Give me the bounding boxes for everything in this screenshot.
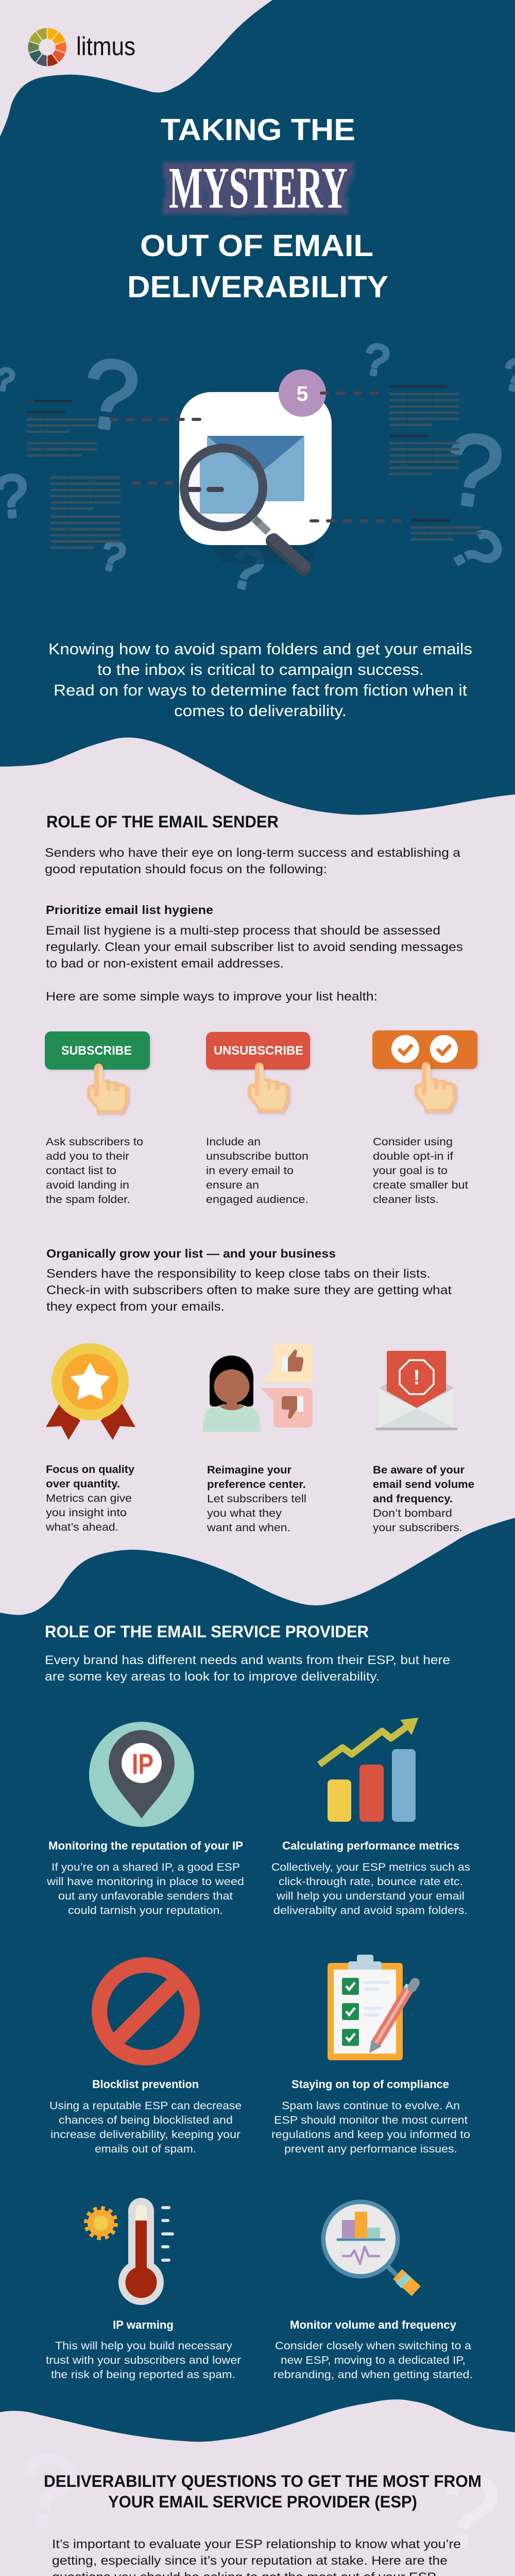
- title: DELIVERABILITY: [127, 270, 388, 304]
- illustration: question marks behind email icon: ?: [360, 334, 392, 386]
- illustration: question marks behind email icon: ?: [76, 337, 145, 453]
- illustration: question marks behind email icon: [0, 334, 515, 604]
- text: be aware of volume: [373, 1464, 474, 1534]
- decoration: pale question marks: [0, 2432, 515, 2576]
- text: esp intro: are some key areas to look for to improve deliverability.: [45, 1670, 380, 1684]
- text: reimagine preference center: Let subscribers tell: [207, 1493, 306, 1505]
- text: unsubscribe tip: ensure an: [206, 1179, 259, 1191]
- text: calculating performance metrics: [271, 1839, 470, 1917]
- text: subscribe tip: Ask subscribers to: [46, 1136, 143, 1148]
- text: ip warming: trust with your subscribers and lower: [46, 2354, 241, 2366]
- panel: double opt-in button with hand: [372, 1030, 477, 1112]
- text: focus on quality: Focus on quality: [46, 1463, 134, 1476]
- text: monitoring reputation: [46, 1839, 244, 1917]
- text: calculating performance metrics: will help you understand your email: [276, 1890, 465, 1902]
- text: prioritize email list hygiene: Prioritize email list hygiene: [46, 903, 213, 917]
- text: focus on quality: over quantity.: [46, 1478, 120, 1490]
- icon: clipboard with pencil: [328, 1955, 415, 2060]
- text: prioritize email list hygiene: Here are some simple ways to improve your list health:: [46, 990, 377, 1004]
- text: monitoring reputation: out any unfavorable senders that: [58, 1890, 233, 1902]
- text: blocklist prevention: [49, 2078, 242, 2155]
- text: be aware of volume: email send volume: [373, 1478, 474, 1490]
- panel: hero navy background: [0, 0, 515, 815]
- text: organically grow your list: [46, 1247, 452, 1314]
- text: be aware of volume: and frequency.: [373, 1493, 453, 1505]
- text: focus on quality: what’s ahead.: [45, 1521, 118, 1533]
- text: reimagine preference center: [207, 1464, 306, 1534]
- text: staying on top of compliance: Staying on top of compliance: [291, 2078, 449, 2091]
- text: esp intro: [45, 1653, 450, 1684]
- text: monitor volume and frequency: rebranding, and when getting started.: [273, 2368, 473, 2381]
- intro text: [48, 640, 472, 720]
- text: calculating performance metrics: Calculating performance metrics: [282, 1839, 459, 1852]
- text: calculating performance metrics: Collectively, your ESP metrics such as: [271, 1861, 470, 1873]
- intro text: comes to deliverability.: [174, 702, 347, 720]
- panel: subscribe button with hand: SUBSCRIBE: [61, 1044, 132, 1058]
- icon: envelope with alert: !: [413, 1366, 420, 1389]
- text: subscribe tip: avoid landing in: [46, 1179, 129, 1191]
- text: evaluate your esp relationship: It’s important to evaluate your ESP relationship to know what you’re: [52, 2537, 461, 2551]
- text: evaluate your esp relationship: [52, 2537, 461, 2576]
- heading: role of the email service provider: ROLE OF THE EMAIL SERVICE PROVIDER: [45, 1622, 369, 1641]
- text: subscribe tip: add you to their: [46, 1150, 129, 1162]
- icon: ip location pin: IP: [132, 1748, 153, 1780]
- text: staying on top of compliance: ESP should monitor the most current: [274, 2114, 468, 2126]
- text: ip warming: [46, 2318, 241, 2381]
- text: prioritize email list hygiene: regularly. Clean your email subscriber list to avoid sending messages: [46, 940, 463, 954]
- text: organically grow your list: they expect from your emails.: [46, 1300, 225, 1314]
- logo: litmus: [28, 28, 135, 67]
- text: double opt-in tip: [373, 1136, 468, 1206]
- text: be aware of volume: Don’t bombard: [373, 1507, 452, 1519]
- illustration: magnifying glass: [184, 422, 305, 568]
- text: monitoring reputation: If you’re on a shared IP, a good ESP: [52, 1861, 240, 1873]
- text: reimagine preference center: preference center.: [207, 1478, 306, 1490]
- illustration: question marks behind email icon: ?: [438, 411, 509, 530]
- text: prioritize email list hygiene: to bad or non-existent email addresses.: [46, 957, 284, 971]
- illustration: dashed connector lines: [111, 393, 403, 521]
- text: unsubscribe tip: [206, 1136, 308, 1206]
- icon: medal: [46, 1343, 135, 1440]
- text: monitor volume and frequency: [273, 2318, 473, 2381]
- text: organically grow your list: Organically grow your list — and your business: [46, 1247, 336, 1260]
- icon: person with thumbs up and down: [202, 1343, 313, 1432]
- text: sender intro: good reputation should focus on the following:: [45, 862, 327, 876]
- text: staying on top of compliance: [271, 2078, 470, 2155]
- heading: deliverability questions: [44, 2472, 482, 2511]
- text: monitor volume and frequency: Monitor volume and frequency: [290, 2318, 457, 2331]
- title: [127, 113, 388, 304]
- text: reimagine preference center: you what they: [207, 1507, 282, 1519]
- text: monitor volume and frequency: Consider closely when switching to a: [275, 2340, 471, 2352]
- text: be aware of volume: your subscribers.: [373, 1521, 462, 1534]
- title: MYSTERY: [169, 155, 348, 221]
- text: organically grow your list: Senders have the responsibility to keep close tabs on their lists.: [46, 1267, 431, 1281]
- text: ip warming: IP warming: [113, 2318, 174, 2331]
- text: staying on top of compliance: regulations and keep you informed to: [271, 2128, 470, 2141]
- heading: deliverability questions: YOUR EMAIL SERVICE PROVIDER (ESP): [108, 2493, 417, 2511]
- text: monitoring reputation: Monitoring the reputation of your IP: [48, 1839, 243, 1852]
- text: unsubscribe tip: unsubscribe button: [206, 1150, 308, 1162]
- text: be aware of volume: Be aware of your: [373, 1464, 465, 1476]
- text: double opt-in tip: cleaner lists.: [373, 1193, 439, 1206]
- decoration: pale question marks: ?: [431, 2450, 506, 2572]
- panel: unsubscribe button with hand: [206, 1032, 310, 1113]
- text: blocklist prevention: increase deliverability, keeping your: [50, 2128, 241, 2141]
- text: evaluate your esp relationship: getting, especially since it’s your reputation at stake. Here are the: [52, 2554, 448, 2568]
- text: sender intro: [45, 846, 461, 876]
- text: double opt-in tip: your goal is to: [373, 1164, 448, 1177]
- text: calculating performance metrics: click-through rate, bounce rate etc.: [279, 1875, 463, 1888]
- logo: litmus: litmus: [76, 32, 135, 61]
- icon: bar chart with rising arrow: [319, 1718, 418, 1822]
- text: unsubscribe tip: engaged audience.: [206, 1193, 308, 1206]
- heading: deliverability questions: DELIVERABILITY QUESTIONS TO GET THE MOST FROM: [44, 2472, 482, 2490]
- illustration: placeholder text blocks: [27, 386, 481, 548]
- text: double opt-in tip: double opt-in if: [373, 1150, 453, 1162]
- text: monitoring reputation: could tarnish your reputation.: [68, 1904, 223, 1917]
- decoration: pale question marks: ?: [13, 2432, 81, 2550]
- navy section: role of the email service provider background: [0, 1518, 515, 2442]
- text: focus on quality: you insight into: [46, 1506, 127, 1519]
- icon: ip location pin: [89, 1722, 194, 1827]
- icon: envelope with alert: [375, 1351, 458, 1430]
- text: staying on top of compliance: Spam laws continue to evolve. An: [282, 2099, 460, 2112]
- text: blocklist prevention: Using a reputable ESP can decrease: [49, 2099, 242, 2112]
- text: monitor volume and frequency: new ESP, moving to a dedicated IP,: [281, 2354, 466, 2366]
- text: reimagine preference center: Reimagine your: [207, 1464, 292, 1476]
- text: monitoring reputation: will have monitoring in place to weed: [46, 1875, 244, 1888]
- title: TAKING THE: [161, 113, 355, 147]
- text: unsubscribe tip: in every email to: [206, 1164, 294, 1177]
- text: subscribe tip: contact list to: [46, 1164, 116, 1177]
- illustration: question marks behind email icon: ?: [224, 534, 270, 604]
- intro text: Read on for ways to determine fact from fiction when it: [54, 681, 467, 699]
- text: esp intro: Every brand has different needs and wants from their ESP, but here: [45, 1653, 450, 1667]
- text: ip warming: the risk of being reported as spam.: [51, 2368, 235, 2381]
- heading: role of the email sender: ROLE OF THE EMAIL SENDER: [46, 812, 279, 831]
- text: blocklist prevention: chances of being blocklisted and: [59, 2114, 233, 2126]
- text: double opt-in tip: create smaller but: [373, 1179, 468, 1191]
- panel: unsubscribe button with hand: UNSUBSCRIBE: [214, 1044, 303, 1058]
- icon: thermometer and sun: [87, 2198, 173, 2305]
- text: ip warming: This will help you build necessary: [55, 2340, 232, 2352]
- text: prioritize email list hygiene: [46, 903, 463, 1004]
- text: subscribe tip: [46, 1136, 143, 1206]
- intro text: Knowing how to avoid spam folders and get your emails: [48, 640, 472, 658]
- text: sender intro: Senders who have their eye on long-term success and establishing a: [45, 846, 461, 860]
- illustration: email app icon: [179, 369, 332, 545]
- text: reimagine preference center: want and when.: [207, 1521, 290, 1534]
- text: unsubscribe tip: Include an: [206, 1136, 261, 1148]
- text: blocklist prevention: Blocklist prevention: [92, 2078, 199, 2091]
- text: double opt-in tip: Consider using: [373, 1136, 453, 1148]
- intro text: to the inbox is critical to campaign success.: [97, 660, 424, 679]
- illustration: email card shadow: [210, 545, 314, 564]
- panel: subscribe button with hand: [45, 1031, 150, 1114]
- text: organically grow your list: Check-in with subscribers often to make sure they are getting what: [46, 1283, 452, 1297]
- text: subscribe tip: the spam folder.: [46, 1193, 130, 1206]
- icon: magnifier with chart: [321, 2200, 416, 2291]
- illustration: question marks behind email icon: ?: [96, 531, 130, 581]
- text: focus on quality: Metrics can give: [46, 1492, 132, 1504]
- text: staying on top of compliance: prevent any performance issues.: [284, 2143, 457, 2155]
- illustration: email app icon: 5: [297, 382, 308, 405]
- text: prioritize email list hygiene: Email list hygiene is a multi-step process that should be assessed: [46, 924, 440, 938]
- text: focus on quality: [45, 1463, 134, 1533]
- text: blocklist prevention: emails out of spam.: [95, 2143, 196, 2155]
- text: calculating performance metrics: deliverabilty and avoid spam folders.: [273, 1904, 468, 1917]
- icon: prohibited sign: [99, 1965, 192, 2058]
- title: OUT OF EMAIL: [140, 229, 373, 263]
